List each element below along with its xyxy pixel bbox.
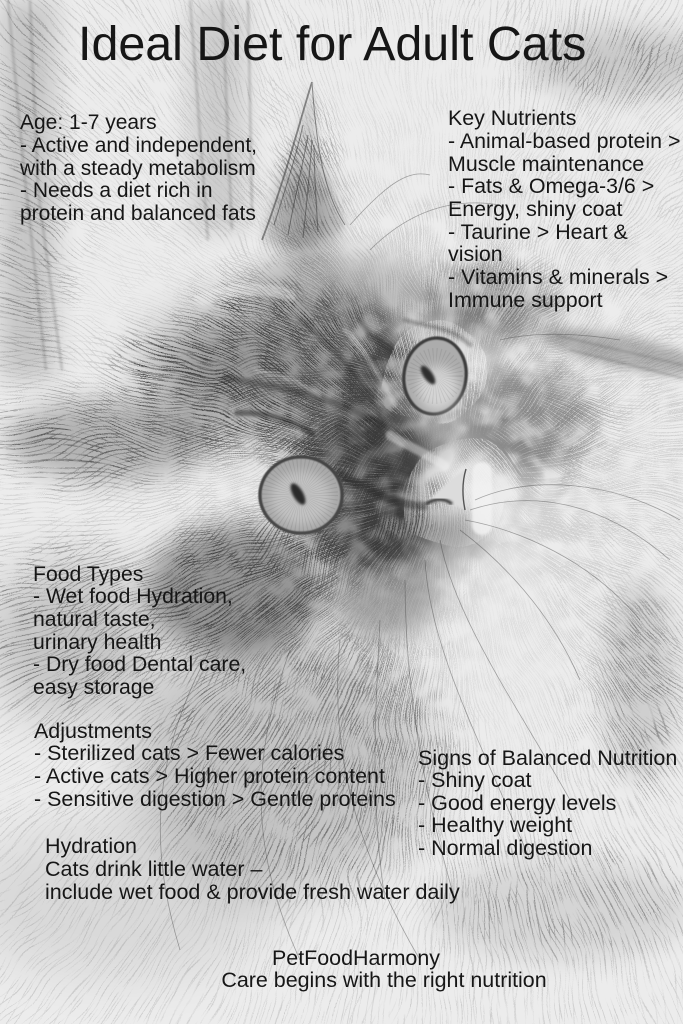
- text block: key nutrients: Muscle maintenance: [448, 152, 644, 176]
- cat ear: [262, 82, 345, 246]
- text block: adjustments: [34, 719, 396, 811]
- text block: key nutrients: Key Nutrients: [448, 106, 576, 130]
- text block: hydration: include wet food & provide fresh water daily: [45, 880, 460, 904]
- text block: signs of balanced nutrition: - Normal digestion: [418, 836, 592, 860]
- text block: food types: [33, 563, 246, 699]
- text block: adjustments: Adjustments: [34, 719, 152, 743]
- text block: age: protein and balanced fats: [20, 202, 256, 225]
- dark facial markings: [225, 320, 470, 506]
- text block: key nutrients: - Vitamins & minerals >: [448, 265, 668, 289]
- text block: food types: natural taste,: [33, 608, 156, 631]
- text block: key nutrients: vision: [448, 242, 503, 266]
- text block: food types: - Wet food Hydration,: [33, 585, 233, 608]
- text block: signs of balanced nutrition: Signs of Balanced Nutrition: [418, 746, 677, 770]
- text block: adjustments: - Sterilized cats > Fewer calories: [34, 741, 344, 765]
- light fur highlights: [200, 290, 482, 525]
- long fur and whiskers: [160, 174, 680, 960]
- text block: food types: Food Types: [33, 563, 143, 586]
- text block: key nutrients: Energy, shiny coat: [448, 197, 622, 221]
- footer brand and tagline: Care begins with the right nutrition: [221, 968, 547, 992]
- icon: cat nose: [426, 469, 466, 510]
- text block: hydration: Cats drink little water –: [45, 857, 263, 881]
- footer brand and tagline: PetFoodHarmony: [272, 946, 440, 970]
- text block: age: [19, 111, 257, 225]
- text block: signs of balanced nutrition: - Shiny coat: [418, 768, 532, 792]
- text block: key nutrients: Immune support: [448, 288, 603, 312]
- text block: food types: - Dry food Dental care,: [33, 653, 246, 676]
- text block: hydration: [45, 834, 460, 904]
- text block: food types: urinary health: [33, 631, 161, 654]
- text block: age: - Needs a diet rich in: [20, 179, 213, 202]
- text block: signs of balanced nutrition: - Good energy levels: [418, 791, 616, 815]
- icon: cat right eye: [399, 334, 471, 418]
- text block: key nutrients: [448, 106, 680, 312]
- icon: cat left eye: [260, 457, 342, 533]
- text block: key nutrients: - Fats & Omega-3/6 >: [448, 174, 654, 198]
- text block: key nutrients: - Animal-based protein >: [448, 129, 680, 153]
- text block: signs of balanced nutrition: - Healthy weight: [418, 813, 572, 837]
- footer brand and tagline: [221, 946, 547, 992]
- cat tonal shading: [0, 165, 590, 890]
- text block: key nutrients: - Taurine > Heart &: [448, 220, 628, 244]
- text block: age: Age: 1-7 years: [20, 111, 157, 134]
- text block: adjustments: - Sensitive digestion > Gentle proteins: [34, 787, 396, 811]
- text block: food types: easy storage: [33, 676, 154, 699]
- title: Ideal Diet for Adult Cats: [78, 17, 586, 71]
- text block: hydration: Hydration: [45, 834, 137, 858]
- text block: age: with a steady metabolism: [19, 157, 256, 180]
- text block: age: - Active and independent,: [20, 134, 257, 157]
- text block: signs of balanced nutrition: [418, 746, 677, 860]
- text block: adjustments: - Active cats > Higher protein content: [34, 764, 385, 788]
